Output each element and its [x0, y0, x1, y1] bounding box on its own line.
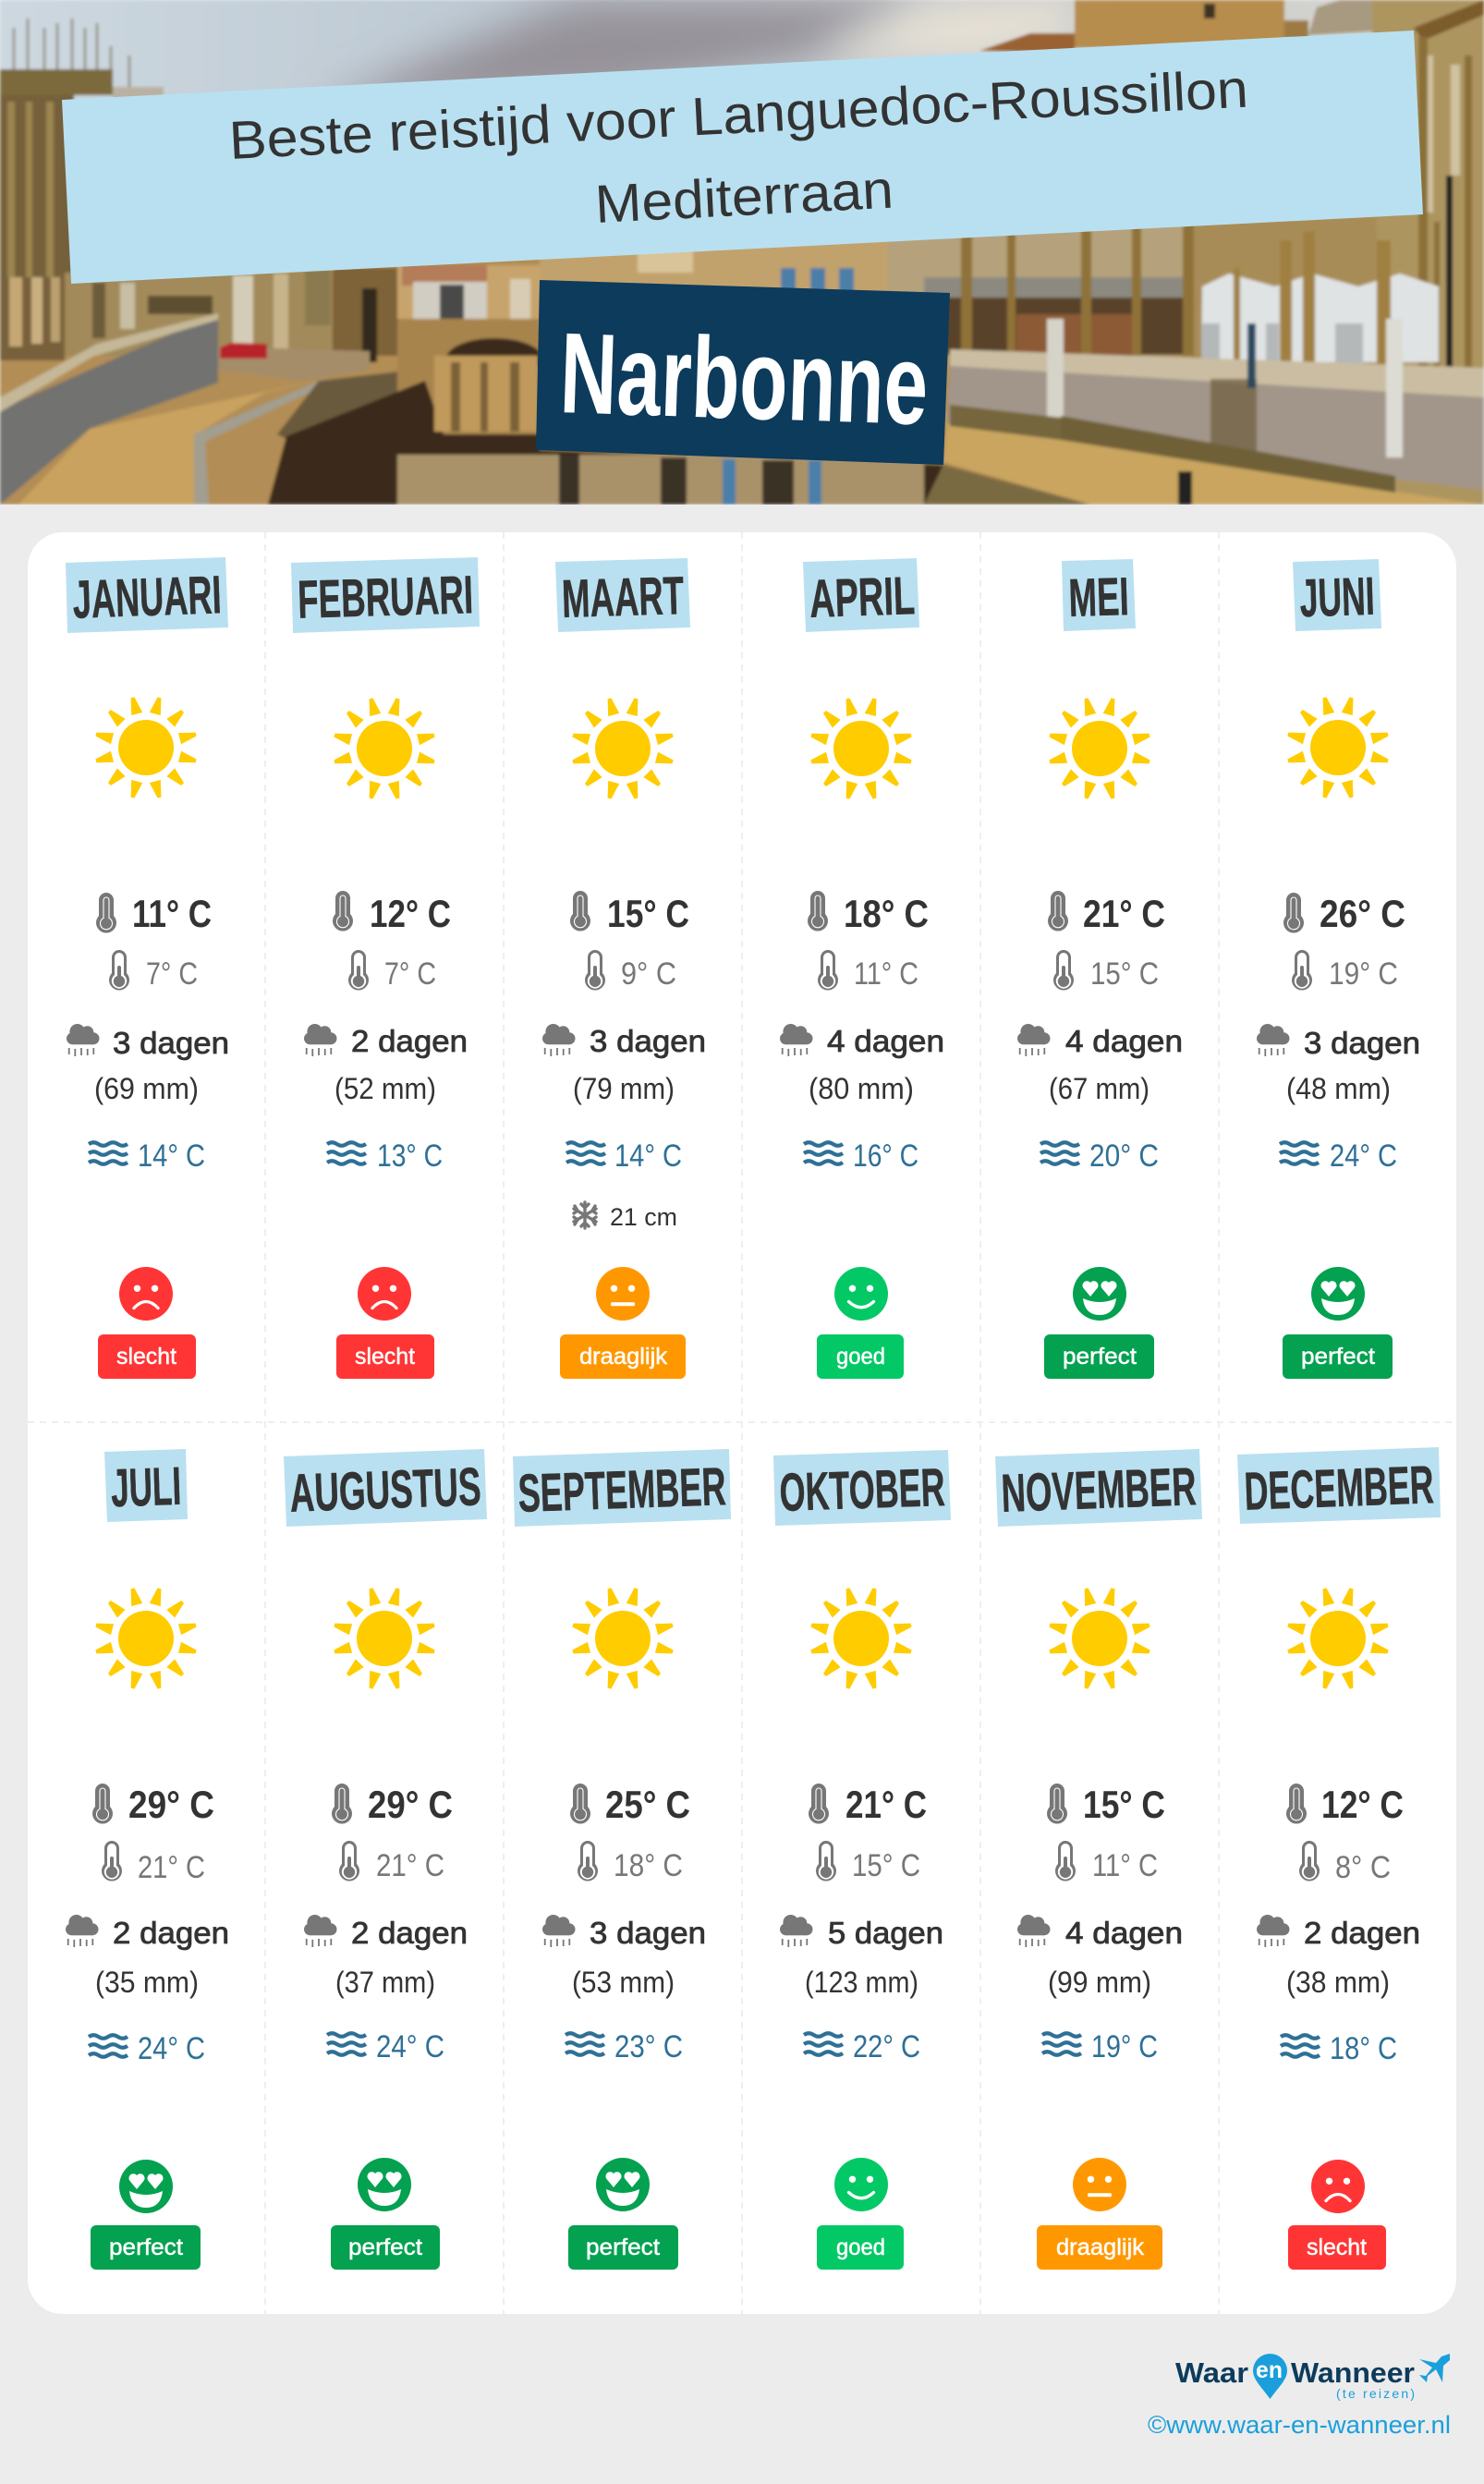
rain days — [542, 1024, 706, 1058]
max temperature — [332, 1783, 453, 1826]
rating — [560, 1267, 686, 1379]
rainfall: (38 mm) — [1286, 1966, 1390, 1999]
heading: juli: JULI — [110, 1456, 182, 1518]
min temperature: 15° C — [852, 1848, 920, 1883]
rating: draaglijk — [579, 1344, 668, 1370]
title line 2: Mediterraan — [593, 160, 894, 235]
heading: juli — [104, 1449, 188, 1522]
min temperature — [109, 950, 198, 992]
panel: november — [995, 1449, 1202, 2270]
heading: juni — [1293, 559, 1381, 631]
sea temperature — [566, 2029, 683, 2064]
max temperature — [333, 891, 451, 935]
sea temperature — [327, 1138, 443, 1174]
min temperature: 18° C — [614, 1848, 683, 1883]
rating — [336, 1267, 434, 1379]
sea temperature: 14° C — [614, 1138, 682, 1174]
rating: slecht — [116, 1344, 176, 1370]
heading: april — [803, 558, 919, 632]
icon: sun — [1048, 697, 1151, 800]
sea temperature: 23° C — [614, 2029, 683, 2064]
rating — [331, 2158, 440, 2270]
sea temperature: 18° C — [1330, 2031, 1397, 2066]
icon: plane — [1419, 2354, 1450, 2382]
rain days — [780, 1024, 944, 1058]
logo: Waar en Wanneer: Waar — [1175, 2356, 1248, 2389]
sea temperature: 24° C — [138, 2031, 205, 2066]
sea temperature — [1042, 2029, 1158, 2064]
max temperature: 21° C — [845, 1783, 927, 1826]
max temperature — [570, 1783, 690, 1826]
panel: augustus — [284, 1449, 487, 2270]
heading: juni: JUNI — [1299, 566, 1376, 628]
max temperature — [1286, 1783, 1404, 1826]
heading: februari — [291, 557, 480, 633]
icon: sun — [94, 696, 198, 799]
heading: november — [995, 1449, 1202, 1527]
heading: augustus — [284, 1449, 487, 1527]
rating: perfect — [586, 2234, 660, 2260]
sea temperature: 22° C — [853, 2029, 920, 2064]
rating — [1037, 2158, 1162, 2270]
icon: sun — [1048, 1587, 1151, 1690]
min temperature — [1299, 1841, 1391, 1885]
heading: februari: FEBRUARI — [297, 565, 474, 630]
min temperature — [585, 950, 676, 992]
rain days — [542, 1915, 706, 1950]
min temperature — [578, 1841, 683, 1883]
rain days: 5 dagen — [828, 1916, 943, 1950]
rating: perfect — [348, 2234, 422, 2260]
panel: december — [1237, 1447, 1441, 2270]
panel: september — [513, 1449, 731, 2270]
sea temperature: 13° C — [377, 1138, 443, 1174]
heading: mei — [1062, 559, 1136, 631]
heading: augustus: AUGUSTUS — [288, 1456, 482, 1524]
rain days — [1017, 1024, 1183, 1058]
min temperature: 15° C — [1090, 956, 1159, 992]
heading: januari — [66, 557, 228, 633]
icon: map pin: en — [1256, 2357, 1283, 2383]
min temperature: 11° C — [1092, 1848, 1158, 1883]
rainfall: (37 mm) — [335, 1966, 435, 1999]
rain days: 4 dagen — [827, 1024, 944, 1058]
rainfall: (52 mm) — [335, 1072, 436, 1105]
rating: slecht — [1307, 2234, 1367, 2260]
rainfall: (48 mm) — [1286, 1072, 1391, 1105]
rating: slecht — [355, 1344, 415, 1370]
heading: oktober: OKTOBER — [779, 1457, 946, 1523]
rating — [91, 2160, 201, 2270]
min temperature — [1053, 950, 1159, 992]
max temperature — [92, 1783, 214, 1826]
rating — [1288, 2160, 1386, 2270]
rating: perfect — [109, 2234, 183, 2260]
panel: juni — [1257, 559, 1420, 1379]
city name banner — [536, 280, 950, 465]
rating — [817, 2158, 904, 2270]
max temperature: 29° C — [368, 1783, 453, 1826]
max temperature — [1283, 892, 1405, 935]
max temperature: 29° C — [128, 1783, 214, 1826]
city name: Narbonne — [558, 310, 930, 449]
panel: april — [780, 558, 944, 1379]
max temperature: 12° C — [1321, 1783, 1404, 1826]
min temperature — [818, 950, 918, 992]
sea temperature: 24° C — [376, 2029, 444, 2064]
sea temperature — [804, 1138, 918, 1174]
min temperature: 21° C — [376, 1848, 444, 1883]
sea temperature: 24° C — [1330, 1138, 1397, 1174]
rain days: 3 dagen — [590, 1024, 706, 1058]
max temperature: 12° C — [370, 892, 451, 935]
header photo: Narbonne canal — [0, 0, 1484, 505]
sea temperature: 16° C — [853, 1138, 918, 1174]
rain days: 2 dagen — [351, 1024, 468, 1058]
min temperature: 19° C — [1329, 956, 1398, 992]
rain days: 2 dagen — [113, 1916, 229, 1950]
title banner — [62, 30, 1423, 284]
rain days — [1017, 1915, 1183, 1950]
max temperature: 15° C — [607, 892, 689, 935]
rating — [817, 1267, 904, 1379]
sea temperature — [566, 1138, 682, 1174]
panel: oktober — [773, 1450, 951, 2270]
icon: map pin — [1253, 2354, 1287, 2399]
sea temperature — [89, 2031, 205, 2066]
max temperature: 11° C — [132, 892, 212, 935]
rating: perfect — [1301, 1344, 1375, 1370]
icon: sun — [94, 1587, 198, 1690]
rating — [568, 2158, 678, 2270]
min temperature — [348, 950, 436, 992]
icon: sun — [333, 697, 436, 800]
website url: ©www.waar-en-wanneer.nl — [1148, 2411, 1451, 2439]
min temperature — [1292, 950, 1398, 992]
logo: Waar en Wanneer — [1175, 2354, 1450, 2401]
rain days: 3 dagen — [1304, 1026, 1420, 1060]
panel: maart — [542, 558, 706, 1379]
sea temperature — [89, 1138, 205, 1174]
snow: 21 cm — [610, 1203, 677, 1231]
icon: sun — [1286, 696, 1390, 799]
rating — [1283, 1267, 1393, 1379]
heading: oktober — [773, 1450, 951, 1526]
rating — [98, 1267, 196, 1379]
rain days — [780, 1915, 943, 1950]
sea temperature: 20° C — [1089, 1138, 1159, 1174]
rainfall: (53 mm) — [572, 1966, 675, 1999]
max temperature — [1048, 891, 1165, 935]
icon: sun — [1286, 1587, 1390, 1690]
sea temperature — [804, 2029, 920, 2064]
heading: april: APRIL — [809, 566, 916, 629]
min temperature — [1055, 1841, 1158, 1883]
rating: perfect — [1063, 1344, 1137, 1370]
rain days — [1257, 1024, 1420, 1060]
icon: sun — [571, 697, 675, 800]
sea temperature: 19° C — [1091, 2029, 1158, 2064]
rain days: 2 dagen — [351, 1916, 468, 1950]
min temperature: 8° C — [1335, 1850, 1391, 1885]
rain days — [67, 1024, 229, 1060]
rain days: 3 dagen — [590, 1916, 706, 1950]
max temperature: 18° C — [844, 892, 929, 935]
icon: sun — [809, 697, 913, 800]
rain days: 4 dagen — [1065, 1916, 1183, 1950]
max temperature: 25° C — [605, 1783, 690, 1826]
rainfall: (123 mm) — [805, 1966, 918, 1999]
rainfall: (99 mm) — [1048, 1966, 1151, 1999]
title line 1: Beste reistijd voor Languedoc-Roussillon — [227, 59, 1249, 171]
heading: mei: MEI — [1068, 566, 1130, 628]
heading: november: NOVEMBER — [1000, 1456, 1198, 1524]
max temperature: 15° C — [1083, 1783, 1165, 1826]
snow — [574, 1202, 677, 1231]
rain days — [304, 1915, 468, 1950]
rain days — [1257, 1915, 1420, 1950]
panel: juli — [66, 1449, 229, 2270]
min temperature — [102, 1841, 205, 1885]
rainfall: (69 mm) — [94, 1072, 199, 1105]
panel: januari — [66, 557, 229, 1379]
heading: maart: MAART — [561, 566, 685, 629]
max temperature — [570, 891, 689, 935]
rain days — [66, 1915, 229, 1950]
rainfall: (80 mm) — [809, 1072, 914, 1105]
min temperature — [339, 1841, 444, 1883]
sea temperature — [1040, 1138, 1159, 1174]
rain days: 3 dagen — [113, 1026, 229, 1060]
min temperature: 21° C — [138, 1850, 205, 1885]
min temperature: 7° C — [146, 956, 198, 992]
panel: februari — [291, 557, 480, 1379]
min temperature: 9° C — [621, 956, 676, 992]
rating: draaglijk — [1056, 2234, 1145, 2260]
heading: maart — [555, 558, 690, 632]
max temperature — [1047, 1783, 1165, 1826]
max temperature — [809, 1783, 927, 1826]
rain days: 4 dagen — [1065, 1024, 1183, 1058]
rain days: 2 dagen — [1304, 1916, 1420, 1950]
max temperature: 26° C — [1320, 892, 1405, 935]
max temperature: 21° C — [1083, 892, 1165, 935]
icon: sun — [333, 1587, 436, 1690]
white card panel — [28, 532, 1456, 2314]
sea temperature — [1280, 1138, 1397, 1174]
rating — [1044, 1267, 1154, 1379]
max temperature — [808, 891, 929, 935]
rating: goed — [836, 2234, 885, 2260]
icon: sun — [809, 1587, 913, 1690]
heading: januari: JANUARI — [72, 565, 223, 630]
rainfall: (67 mm) — [1049, 1072, 1149, 1105]
rain days — [304, 1024, 468, 1058]
min temperature — [816, 1841, 920, 1883]
rainfall: (79 mm) — [573, 1072, 675, 1105]
icon: sun — [571, 1587, 675, 1690]
logo: Waar en Wanneer: (te reizen) — [1336, 2386, 1415, 2401]
sea temperature: 14° C — [138, 1138, 205, 1174]
logo: Waar en Wanneer: Wanneer — [1291, 2356, 1415, 2389]
rating: goed — [836, 1344, 885, 1370]
heading: september: SEPTEMBER — [517, 1456, 727, 1524]
min temperature: 7° C — [384, 956, 436, 992]
sea temperature — [1281, 2031, 1397, 2066]
heading: september — [513, 1449, 731, 1527]
max temperature — [96, 892, 212, 935]
panel: mei — [1017, 559, 1183, 1379]
rainfall: (35 mm) — [95, 1966, 199, 1999]
sea temperature — [327, 2029, 444, 2064]
min temperature: 11° C — [854, 956, 918, 992]
